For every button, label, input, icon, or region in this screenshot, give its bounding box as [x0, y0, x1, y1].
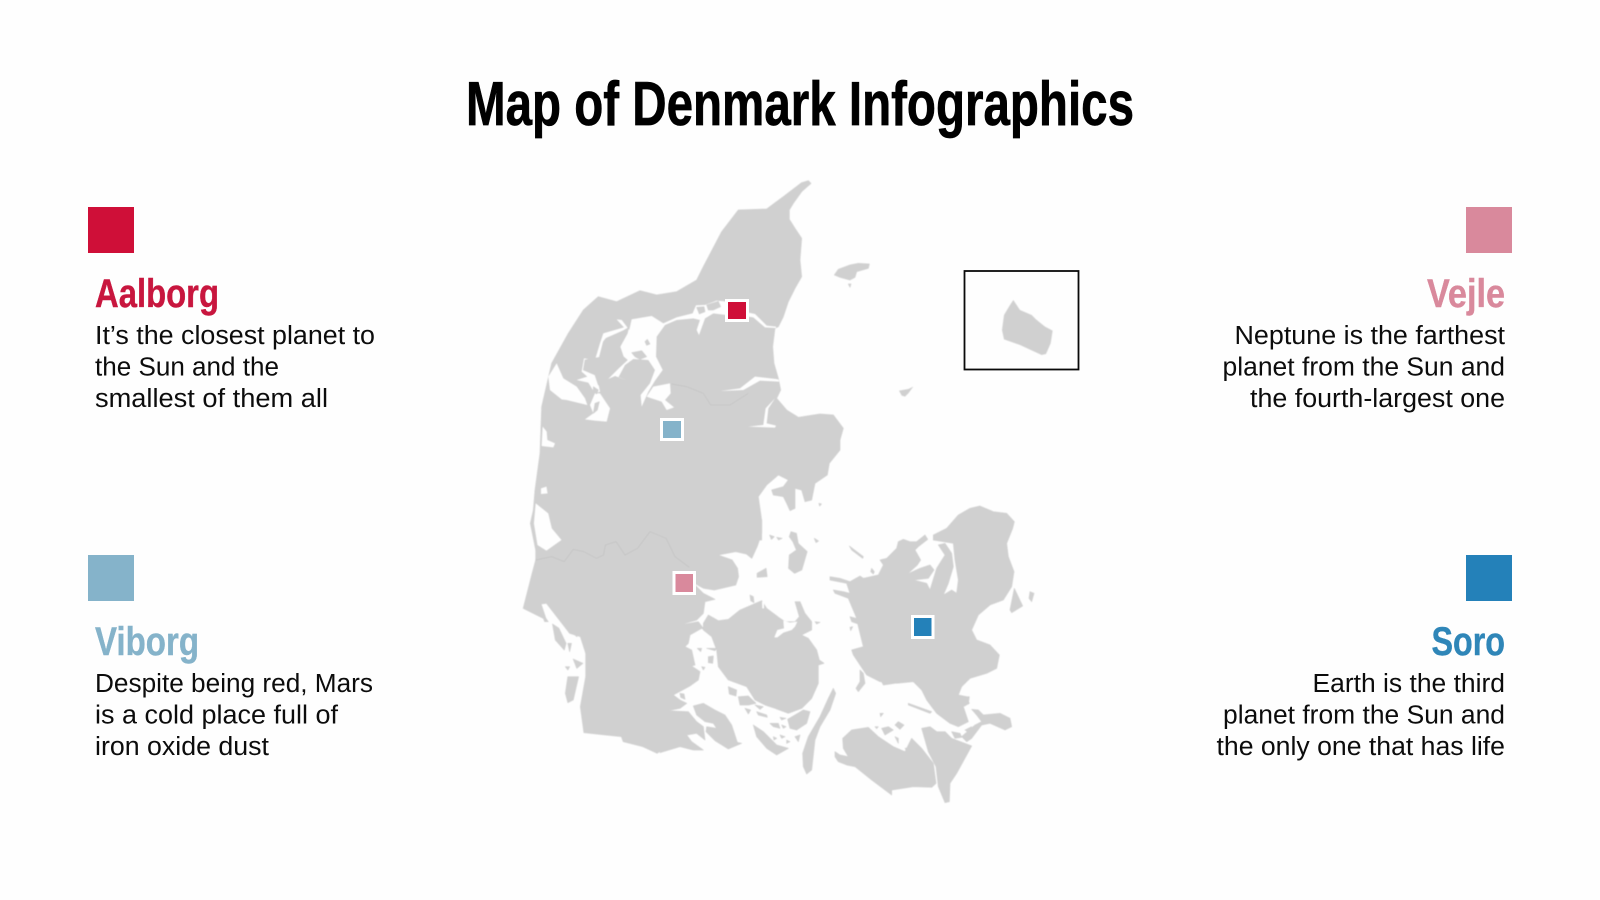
island: Sejeroe	[849, 546, 863, 558]
island: Endelave	[757, 568, 767, 577]
island: Als	[693, 703, 742, 749]
islets in Limfjord	[593, 301, 721, 413]
map: western South Jutland	[523, 487, 821, 753]
swatch: Soro	[1466, 555, 1512, 601]
island: Taasinge	[788, 710, 810, 730]
text: Viborg description: is a cold place full of	[95, 702, 339, 730]
small islands: Little Belt	[680, 648, 717, 699]
text: Vejle description	[1222, 322, 1505, 413]
islands west of Zealand	[850, 568, 932, 713]
panel: Soro	[1216, 555, 1512, 761]
island: Amager	[1010, 588, 1023, 613]
island: Mors	[583, 325, 629, 385]
water: Limfjord	[577, 301, 727, 407]
panel: Aalborg	[88, 207, 375, 413]
islands: Wadden Sea	[541, 612, 583, 703]
water: Ringkoebing Fjord	[534, 503, 561, 551]
marker: Viborg	[662, 420, 682, 440]
text: Vejle description: the fourth-largest one	[1250, 385, 1505, 413]
map: Funen and Little Belt	[660, 585, 836, 774]
island: Anholt	[899, 387, 913, 397]
text: Viborg description: iron oxide dust	[95, 733, 269, 761]
text: Soro description: Earth is the third	[1312, 670, 1505, 698]
map of Denmark	[523, 181, 1078, 803]
marker: Vejle	[674, 572, 694, 594]
swatch: Aalborg	[88, 207, 134, 253]
boundary line south	[536, 532, 689, 567]
island: Saltholm	[1029, 592, 1034, 602]
small islands: Smaaland	[875, 687, 972, 753]
text: Aalborg description: the Sun and the	[95, 354, 279, 382]
title: Map of Denmark Infographics	[466, 70, 1134, 139]
island: Falster	[922, 727, 972, 803]
text: Vejle description: planet from the Sun and	[1222, 354, 1505, 382]
landmass: South Jutland east	[660, 585, 715, 753]
text: Aalborg description: It’s the closest planet to	[95, 322, 375, 350]
text: Aalborg description	[95, 322, 375, 413]
inset frame: Bornholm	[964, 271, 1078, 370]
water: Odense Fjord	[774, 621, 797, 637]
water: small lake west coast	[541, 487, 547, 494]
water: Limfjord east arm	[748, 313, 776, 328]
water: Nissum Fjord	[542, 427, 555, 447]
island: Funen	[703, 601, 824, 713]
island: Langeland	[803, 688, 836, 774]
text: Soro description: planet from the Sun and	[1223, 702, 1505, 730]
boundary line north	[672, 384, 748, 405]
island: Lolland	[835, 727, 936, 795]
map: northern Jutland	[533, 181, 869, 540]
landmass: South Jutland west	[523, 490, 762, 753]
heading: Soro: Soro	[1432, 620, 1505, 664]
text: Soro description	[1216, 670, 1505, 761]
water: Venoe bay	[585, 393, 610, 422]
island: Zealand	[830, 506, 1014, 727]
water: Salling bay	[647, 383, 674, 410]
heading: Viborg: Viborg	[95, 620, 199, 664]
text: Aalborg description: smallest of them all	[95, 385, 328, 413]
swatch: Vejle	[1466, 207, 1512, 253]
map landmasses	[523, 181, 1053, 803]
island: Moen	[962, 709, 1012, 742]
island: Samsoe	[789, 532, 807, 573]
island: Bornholm	[1002, 300, 1053, 355]
heading: Aalborg: Aalborg	[95, 272, 219, 316]
water: Nissum Bredning	[548, 363, 587, 405]
swatch: Viborg	[88, 555, 134, 601]
panel: Vejle	[1222, 207, 1512, 413]
marker: Aalborg	[726, 300, 748, 320]
small islets Kattegat	[770, 503, 821, 543]
water: Mariager Fjord	[721, 377, 779, 391]
marker: Soro	[912, 616, 933, 638]
small islands: South Funen Archipelago	[728, 595, 820, 743]
island: Aeroe	[753, 725, 788, 755]
panel: Viborg	[88, 555, 373, 761]
text: Viborg description	[95, 670, 373, 761]
water: Randers Fjord	[748, 398, 776, 428]
map: Zealand and southern islands	[830, 506, 1034, 803]
water: Funen notch	[762, 602, 764, 608]
island: Laeso	[834, 263, 869, 287]
landmass: North Jutland	[533, 181, 843, 540]
text: Soro description: the only one that has life	[1216, 733, 1505, 761]
heading: Vejle: Vejle	[1427, 272, 1505, 316]
text: Viborg description: Despite being red, Mars	[95, 670, 373, 698]
text: Vejle description: Neptune is the farthest	[1234, 322, 1505, 350]
